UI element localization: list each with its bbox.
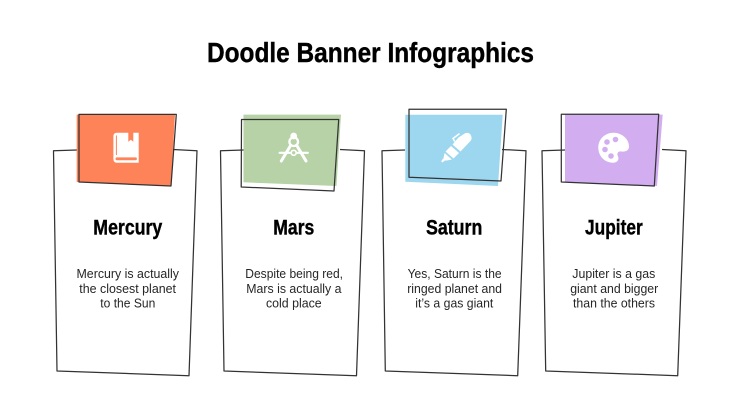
banner: Mars [241, 115, 341, 191]
card outline: Saturn [382, 150, 526, 376]
text: Jupiter description: than the others [573, 296, 655, 310]
card outline: Mars [220, 150, 364, 376]
text: Mercury description: Mercury is actually [76, 267, 180, 281]
icon: pen [441, 133, 472, 162]
text: Mercury description: the closest planet [79, 282, 176, 296]
icon: palette [598, 133, 629, 163]
text: Mercury description [76, 267, 180, 310]
banner: Mercury [77, 114, 176, 186]
title: Doodle Banner Infographics [207, 37, 534, 68]
card outline: Jupiter [542, 150, 686, 376]
heading: Mars: Mars [273, 215, 314, 239]
text: Jupiter description: giant and bigger [570, 282, 658, 296]
text: Mars description: Mars is actually a [246, 282, 342, 296]
card outline: Mercury [54, 150, 197, 376]
text: Jupiter description: Jupiter is a gas [572, 267, 655, 281]
heading: Mercury: Mercury [93, 215, 162, 239]
text: Mars description: Despite being red, [245, 267, 343, 281]
text: Jupiter description [570, 267, 658, 310]
text: Saturn description: it’s a gas giant [415, 296, 494, 310]
text: Mars description [245, 267, 343, 310]
banner: Jupiter [561, 114, 663, 186]
icon: compass [280, 133, 308, 161]
text: Saturn description: ringed planet and [407, 282, 502, 296]
panel: Mars [220, 115, 364, 376]
heading: Saturn: Saturn [426, 215, 482, 239]
icon: book [113, 132, 139, 163]
text: Mercury description: to the Sun [100, 296, 155, 310]
panel: Jupiter [542, 114, 686, 376]
panel: Saturn [382, 109, 526, 376]
text: Saturn description [407, 267, 502, 310]
banner: Saturn [405, 109, 506, 186]
text: Saturn description: Yes, Saturn is the [408, 267, 502, 281]
text: Mars description: cold place [266, 296, 322, 310]
heading: Jupiter: Jupiter [585, 215, 643, 239]
panel: Mercury [54, 114, 197, 376]
